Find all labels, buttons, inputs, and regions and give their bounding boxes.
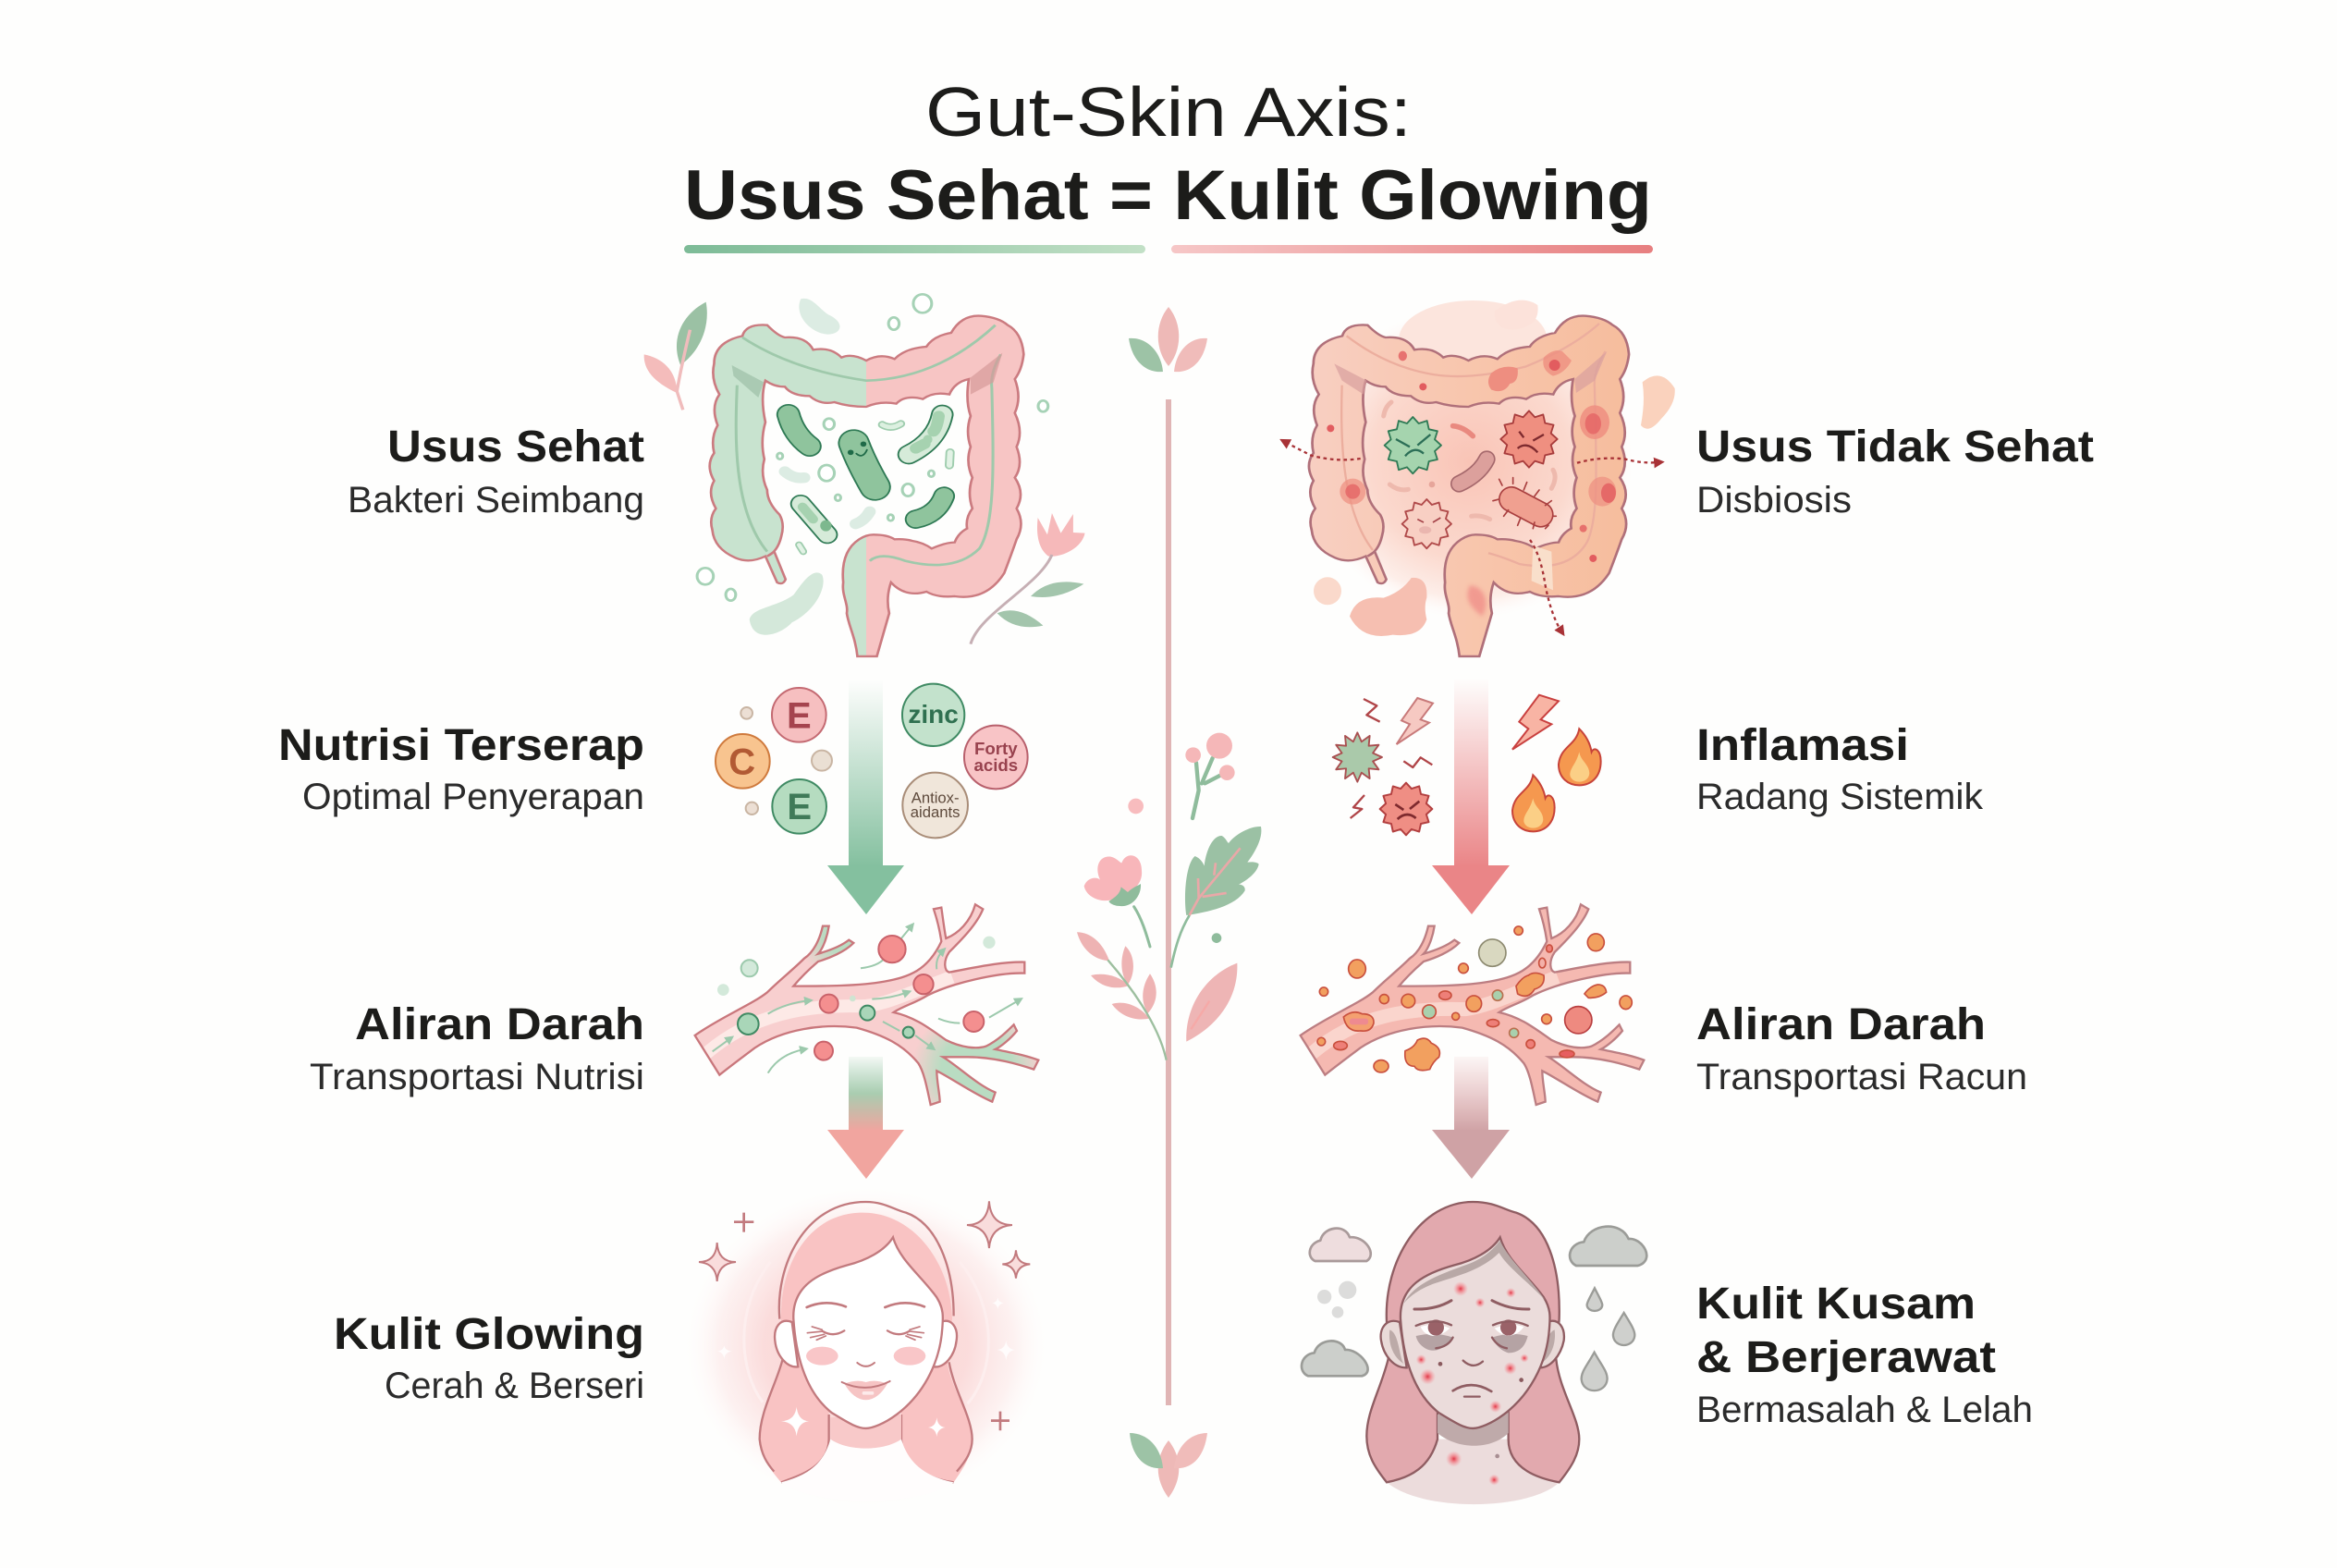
panel: nutrient icons and healthy vessel: Antiox-	[912, 789, 960, 806]
face	[793, 1237, 943, 1428]
panel: nutrient icons and healthy vessel: Forty	[974, 739, 1018, 758]
right column labels: Transportasi Racun	[1696, 1057, 2027, 1097]
spiked capsule spikes	[1493, 478, 1556, 529]
face	[1401, 1237, 1550, 1428]
panel: healthy gut illustration	[644, 294, 1085, 656]
floating bubbles	[697, 294, 1048, 601]
infographic canvas	[281, 85, 2093, 1504]
title line one: Gut-Skin Axis:	[925, 73, 1412, 151]
flames	[1512, 729, 1601, 831]
blood and nutrient cells	[717, 936, 996, 1060]
ears	[775, 1321, 957, 1366]
arrow: green to pink flow	[827, 1057, 904, 1179]
neck	[830, 1415, 901, 1449]
spiked cell	[1333, 732, 1382, 782]
right column labels: Radang Sistemik	[1696, 777, 1984, 817]
angry green virus	[1385, 417, 1441, 473]
panel: nutrient icons and healthy vessel: C	[728, 741, 755, 782]
title line two: Usus Sehat = Kulit Glowing	[684, 156, 1652, 235]
zigzag sparks	[1351, 699, 1432, 818]
arrow: green nutrient flow	[827, 680, 904, 914]
panel: nutrient icons and healthy vessel: aidants	[911, 803, 960, 821]
panel: inflammation icons and toxic vessel	[1301, 695, 1644, 1105]
title	[684, 73, 1653, 253]
right column labels: Aliran Darah	[1696, 1000, 1986, 1049]
lightning bolts	[1397, 698, 1433, 744]
sparkles	[699, 1201, 1030, 1430]
tired eyes	[1416, 1334, 1528, 1353]
panel: nutrient icons and healthy vessel: E	[787, 695, 812, 736]
left column labels: Bakteri Seimbang	[348, 480, 644, 521]
panel: nutrient icons and healthy vessel: acids	[973, 755, 1018, 775]
ears	[1381, 1321, 1564, 1367]
panel: unhealthy gut illustration	[1284, 300, 1675, 656]
panel: nutrient icons and healthy vessel: E	[787, 787, 812, 827]
hair	[1366, 1202, 1579, 1482]
right column labels: Usus Tidak Sehat	[1696, 423, 2094, 472]
green underline	[684, 245, 1145, 253]
left column labels: Cerah & Berseri	[385, 1366, 644, 1406]
bottom leaves ornament	[1130, 1433, 1207, 1498]
arrow: red inflammation flow	[1432, 678, 1510, 914]
red underline	[1171, 245, 1653, 253]
central divider with botanical decoration	[1077, 307, 1261, 1498]
left column labels: Usus Sehat	[387, 423, 644, 472]
right column labels: Inflamasi	[1696, 721, 1909, 770]
pale virus	[1402, 499, 1451, 548]
smiling bacterium face	[849, 442, 867, 456]
middle flowers	[1077, 733, 1261, 1060]
healthy blood vessel	[695, 903, 1045, 1109]
pink glow	[681, 1183, 1051, 1510]
chest	[1387, 1439, 1560, 1504]
right column labels: Bermasalah & Lelah	[1696, 1390, 2033, 1430]
right column labels	[1696, 423, 2094, 1430]
right column labels: & Berjerawat	[1696, 1333, 1996, 1382]
nutrient bubbles	[716, 684, 1028, 838]
left column labels: Transportasi Nutrisi	[310, 1057, 644, 1097]
toxic blood vessel	[1301, 904, 1644, 1105]
left column labels: Nutrisi Terserap	[278, 721, 644, 770]
panel: nutrient icons and healthy vessel	[695, 684, 1045, 1109]
clouds	[1302, 1227, 1646, 1376]
toxin particles	[1317, 926, 1632, 1072]
left column labels: Optimal Penyerapan	[302, 777, 644, 817]
angry cell	[1380, 783, 1432, 835]
background inflammation glow	[1303, 300, 1675, 636]
gut bacteria	[785, 414, 950, 552]
decorative leaves	[644, 299, 1085, 644]
leaky gut arrows	[1284, 442, 1659, 631]
haze dots	[1317, 1281, 1356, 1318]
colon	[710, 316, 1023, 656]
right column labels: Kulit Kusam	[1696, 1280, 1976, 1329]
top leaves ornament	[1129, 307, 1207, 372]
neck shadow	[1438, 1412, 1509, 1446]
smiling mouth	[844, 1381, 887, 1400]
panel: glowing skin face	[681, 1183, 1051, 1510]
left column labels	[278, 423, 644, 1406]
inflamed colon	[1309, 316, 1629, 656]
tear drops	[1582, 1288, 1634, 1390]
hair	[760, 1213, 973, 1482]
colon lesions and contents	[1284, 324, 1659, 631]
left column labels: Kulit Glowing	[334, 1310, 644, 1359]
acne spots	[1416, 1281, 1529, 1486]
right column labels: Disbiosis	[1696, 480, 1852, 521]
left column labels: Aliran Darah	[355, 1000, 644, 1049]
flow arrows	[713, 926, 1020, 1073]
arrow: muted red flow	[1432, 1057, 1510, 1179]
facial features	[807, 1303, 924, 1366]
panel: nutrient icons and healthy vessel: zinc	[908, 700, 959, 729]
panel: dull acne skin face	[1302, 1202, 1646, 1504]
angry red virus	[1500, 410, 1558, 468]
